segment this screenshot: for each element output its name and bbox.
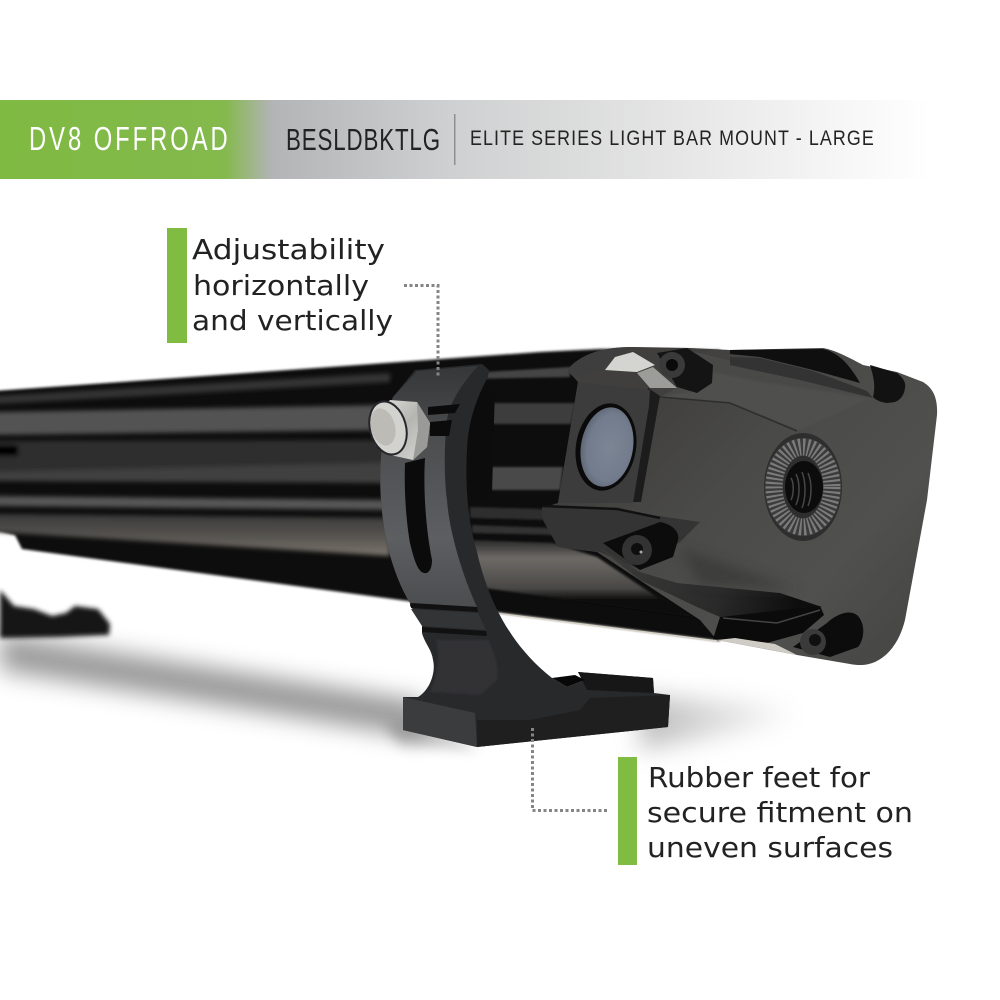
bottom cream edge [470, 610, 717, 641]
callout text [647, 761, 913, 864]
threaded hole [785, 461, 823, 513]
soft under-cap shading [680, 548, 800, 590]
cream corner edge [717, 638, 797, 655]
black lower rim [713, 606, 824, 644]
top silver highlight [605, 352, 655, 372]
band across the top [567, 347, 633, 376]
dark rubber pad behind bracket [470, 383, 495, 502]
top bolt slot [428, 404, 460, 436]
dark fold below cap [597, 546, 822, 617]
bracket front face [380, 366, 478, 607]
lower neck highlight [430, 640, 498, 695]
knurled washer [764, 433, 842, 541]
callout text: and vertically [192, 304, 393, 337]
brand name: DV8 OFFROAD [29, 121, 228, 158]
dark strip beside lens block [630, 388, 660, 502]
ground shadows [0, 634, 795, 750]
lower reflective face [470, 540, 717, 618]
ribs [411, 603, 478, 612]
dotted leader [532, 728, 608, 810]
callout text [192, 233, 393, 337]
callout: adjustability [167, 228, 438, 378]
rear channels right of bracket [468, 367, 575, 535]
rubber foot: side [477, 695, 670, 747]
top screw [657, 348, 713, 393]
rubber foot: upper step [578, 672, 654, 693]
accent bar [167, 228, 187, 343]
top opening [730, 349, 860, 383]
middle screw [603, 522, 678, 570]
bottom screw [793, 612, 863, 657]
callout text: uneven surfaces [647, 831, 893, 864]
product title: ELITE SERIES LIGHT BAR MOUNT - LARGE [470, 127, 874, 150]
part number: BESLDBKTLG [286, 122, 440, 157]
header band [0, 100, 1000, 179]
rear foot, out of focus [0, 590, 110, 638]
callout text: secure fitment on [647, 796, 913, 829]
lens [569, 398, 643, 496]
lens block [558, 382, 650, 503]
lower wedge [542, 507, 700, 570]
callout: rubber feet [532, 728, 913, 865]
bolt and nut [364, 397, 430, 460]
end cap [542, 347, 937, 665]
adjustment slot [405, 458, 432, 573]
dotted leader [404, 286, 438, 378]
upper crease highlight [660, 372, 870, 430]
light bar housing [0, 349, 720, 641]
mounting bracket [380, 364, 670, 747]
callout text: Rubber feet for [648, 761, 871, 794]
accent bar [618, 757, 637, 865]
callout text: horizontally [193, 269, 369, 302]
top right notch [870, 365, 905, 403]
callout text: Adjustability [192, 233, 385, 266]
rubber foot: front face [403, 697, 477, 747]
